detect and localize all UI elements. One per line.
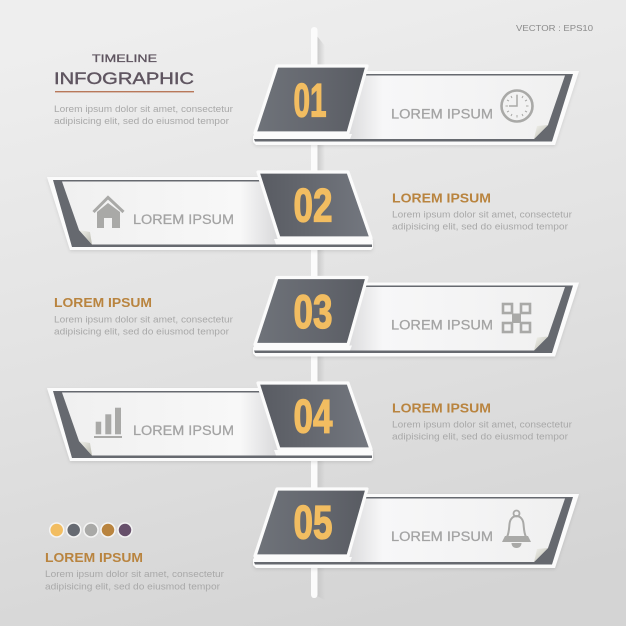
label: LOREM IPSUM: [391, 529, 493, 544]
number 05: 05: [294, 496, 332, 548]
title underline: [55, 91, 194, 92]
intro text: Lorem ipsum dolor sit amet, consectetur: [54, 104, 234, 115]
body: adipisicing elit, sed do eiusmod tempor: [54, 326, 230, 338]
text block 03: [54, 295, 234, 338]
number 04: 04: [294, 390, 332, 442]
timeline spine: [311, 27, 325, 600]
icon: squares: [503, 304, 530, 332]
colour swatches: [50, 523, 132, 537]
number 03: 03: [294, 285, 332, 338]
heading: LOREM IPSUM: [392, 400, 491, 416]
label: LOREM IPSUM: [133, 212, 234, 227]
body: Lorem ipsum dolor sit amet, consectetur: [54, 314, 234, 326]
title: timeline: TIMELINE: [92, 53, 157, 65]
banner 01: [253, 66, 579, 145]
number 01: 01: [294, 74, 326, 126]
intro text: adipisicing elit, sed do eiusmod tempor: [54, 116, 230, 127]
label: LOREM IPSUM: [133, 423, 234, 438]
heading: LOREM IPSUM: [392, 190, 491, 206]
title: infographic: INFOGRAPHIC: [54, 70, 194, 88]
vector label: VECTOR : EPS10: [516, 24, 594, 33]
title block: [54, 53, 234, 127]
heading: LOREM IPSUM: [45, 550, 143, 565]
text block 02: [392, 190, 573, 232]
banner 03: [253, 278, 579, 356]
text block bottom: [45, 550, 225, 592]
body: adipisicing elit, sed do eiusmod tempor: [45, 582, 221, 592]
text block 04: [392, 400, 573, 442]
heading: LOREM IPSUM: [54, 295, 152, 310]
body: Lorem ipsum dolor sit amet, consectetur: [392, 420, 573, 430]
icon: house: [94, 198, 124, 228]
icon: clock: [502, 90, 532, 122]
banner 02: [47, 172, 373, 250]
number 02: 02: [294, 178, 332, 232]
body: adipisicing elit, sed do eiusmod tempor: [392, 222, 569, 232]
body: Lorem ipsum dolor sit amet, consectetur: [45, 569, 225, 580]
body: adipisicing elit, sed do eiusmod tempor: [392, 432, 569, 442]
banner 04: [47, 383, 373, 461]
label: LOREM IPSUM: [391, 106, 493, 122]
icon: bar chart: [94, 408, 122, 438]
body: Lorem ipsum dolor sit amet, consectetur: [392, 210, 573, 220]
banner 05: [253, 489, 579, 568]
label: LOREM IPSUM: [391, 318, 493, 332]
icon: bell: [502, 510, 531, 548]
